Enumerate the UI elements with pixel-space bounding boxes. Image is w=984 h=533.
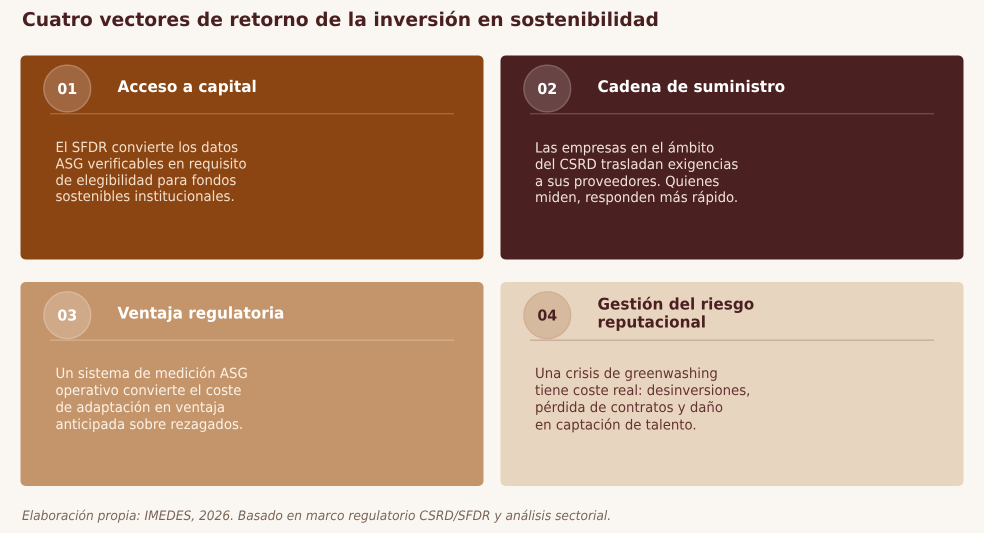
panel: acceso a capital (20, 56, 484, 260)
badge 02: 02 (537, 80, 557, 98)
body text: de elegibilidad para fondos (56, 173, 236, 189)
badge 03: 03 (57, 306, 77, 324)
body text: del CSRD trasladan exigencias (535, 157, 738, 173)
badge 03 (44, 292, 91, 339)
panel: gestion del riesgo reputacional (500, 282, 964, 486)
body text: tiene coste real: desinversiones, (535, 383, 750, 399)
body text: El SFDR convierte los datos (56, 140, 238, 156)
badge 01: 01 (57, 80, 77, 98)
heading: reputacional (598, 312, 706, 332)
body text: ASG verificables en requisito (56, 156, 247, 172)
body text: en captación de talento. (535, 418, 697, 434)
badge 04: 04 (537, 306, 557, 324)
body text: sostenibles institucionales. (56, 189, 235, 205)
heading: Ventaja regulatoria (118, 304, 284, 322)
badge 02 (524, 65, 571, 112)
body text: Una crisis de greenwashing (535, 366, 718, 382)
heading: Gestión del riesgo (598, 294, 754, 314)
source note: Elaboración propia: IMEDES, 2026. Basado en marco regulatorio CSRD/SFDR y análisis sectorial. (22, 509, 611, 524)
panel: ventaja regulatoria (20, 282, 484, 486)
body text: de adaptación en ventaja (56, 400, 225, 416)
body text: Un sistema de medición ASG (56, 366, 248, 382)
body text: anticipada sobre rezagados. (56, 417, 243, 433)
badge 04 (524, 292, 571, 339)
heading: Cadena de suministro (598, 77, 785, 96)
title: Cuatro vectores de retorno de la inversión en sostenibilidad (22, 9, 659, 31)
body text: operativo convierte el coste (56, 383, 241, 399)
body text: a sus proveedores. Quienes (535, 174, 719, 190)
badge 01 (44, 65, 91, 112)
body text: Las empresas en el ámbito (535, 140, 714, 156)
body text: pérdida de contratos y daño (535, 400, 723, 416)
heading: Acceso a capital (118, 77, 257, 96)
body text: miden, responden más rápido. (535, 190, 738, 206)
panel: cadena de suministro (500, 56, 964, 260)
